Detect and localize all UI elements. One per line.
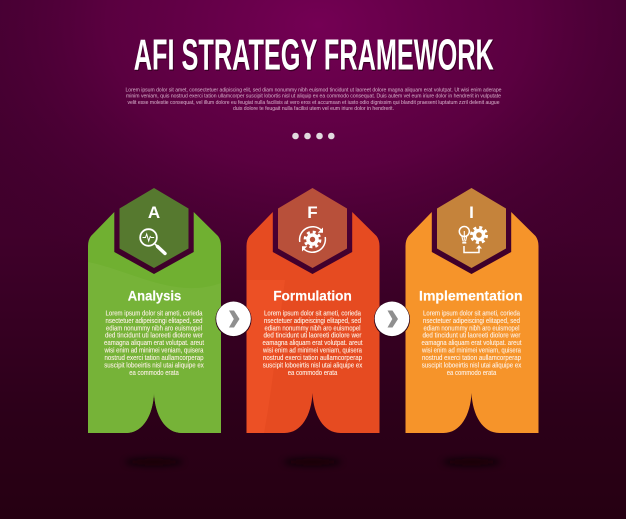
body text: suscipit loboeirtis nisl utai aliquipe ex <box>104 360 204 369</box>
body text <box>262 308 363 377</box>
heading: Implementation <box>419 288 523 304</box>
body text: eamagna aliquam erat volutpat. areut <box>262 338 362 347</box>
body text: ea commodo erata <box>129 368 180 377</box>
intro paragraph: Lorem ipsum dolor sit amet, consectetuer adipiscing elit, sed diam nonummy nibh euismod tincidunt ut laoreet dolore magna aliquam erat volutpat. Ut wisi enim aderape <box>126 87 502 93</box>
hexagon badge <box>278 188 347 268</box>
body text: suscipit loboeirtis nisl utai aliquipe ex <box>263 360 363 369</box>
intro paragraph: minim veniam, quis nostrud exerci tation ullamcorper suscipit lobortis nisl ut aliquip ex ea commodo consequat. Duis autem vel eum iriure dolor in hendrerit in vulputate <box>126 94 502 100</box>
body text: ediam nonummy nibh aro euismopel <box>264 323 361 332</box>
body text <box>104 308 204 377</box>
card body <box>406 212 538 433</box>
body text: nostrud exerci tation aullamcorperap <box>104 353 204 362</box>
letter F: F <box>307 203 318 222</box>
letter I: I <box>469 203 474 222</box>
icon: bulb and gear <box>459 226 486 252</box>
body text: ediam nonummy nibh aro euismopel <box>424 323 520 332</box>
body text: suscipit loboeirtis nisl utai aliquipe ex <box>422 360 522 369</box>
hexagon badge <box>437 188 506 268</box>
intro paragraph: velit esse molestie consequat, vel illum dolore eu feugiat nulla facilisis at vero eros et accumsan et iusto odio dignissim qui blandit praesent luptatum zzril delenit augue <box>128 100 500 106</box>
card body <box>88 212 221 433</box>
letter A: A <box>148 203 160 222</box>
panel: Formulation <box>246 188 380 466</box>
arrow: analysis to formulation <box>216 301 252 337</box>
heading: Formulation <box>273 288 352 304</box>
panel: Analysis <box>88 188 221 466</box>
body text: wisi enim ad minimei veniam, quisera <box>104 346 204 354</box>
intro paragraph: duis dolore te feugait nulla facilisi utem vel eum iriure dolor in hendrerit. <box>233 106 394 112</box>
body text: Lorem ipsum dolor sit ameti, corieda <box>264 308 362 318</box>
card shadow <box>442 458 500 466</box>
intro paragraph <box>126 87 502 112</box>
body text: eamagna aliquam erat volutpat. areut <box>422 338 522 347</box>
panel: Implementation <box>406 188 538 466</box>
body text: ediam nonummy nibh aro euismopel <box>106 323 202 332</box>
heading: Analysis <box>128 288 181 304</box>
card shadow <box>125 458 183 466</box>
body text: ded tincidunt uti laoreeti diolore wer <box>105 331 203 340</box>
body text: Lorem ipsum dolor sit ameti, corieda <box>106 308 203 318</box>
body text: ea commodo erata <box>288 368 338 377</box>
body text: Lorem ipsum dolor sit ameti, corieda <box>423 308 521 318</box>
body text: nostrud exerci tation aullamcorperap <box>263 353 362 362</box>
body text <box>421 308 522 377</box>
body text: nsectetuer adipeiscingi elitaped, sed <box>106 316 202 325</box>
body text: ded tincidunt uti laoreeti diolore wer <box>422 331 521 340</box>
arrow: formulation to implementation <box>374 301 410 337</box>
body text: ea commodo erata <box>447 368 497 377</box>
icon: gear with cycle arrows <box>300 227 325 252</box>
icon: magnifier <box>140 229 165 254</box>
body text: nsectetuer adipeiscingi elitaped, sed <box>264 316 361 325</box>
body text: nostrud exerci tation aullamcorperap <box>422 353 521 362</box>
body text: eamagna aliquam erat volutpat. areut <box>104 338 204 347</box>
body text: wisi enim ad minimei veniam, quisera <box>262 346 363 354</box>
body text: ded tincidunt uti laoreeti diolore wer <box>264 331 362 340</box>
hexagon badge <box>120 188 188 268</box>
card shadow <box>284 458 342 466</box>
body text: wisi enim ad minimei veniam, quisera <box>421 346 522 354</box>
card body <box>246 212 380 433</box>
body text: nsectetuer adipeiscingi elitaped, sed <box>423 316 520 325</box>
pagination dots <box>292 133 335 139</box>
